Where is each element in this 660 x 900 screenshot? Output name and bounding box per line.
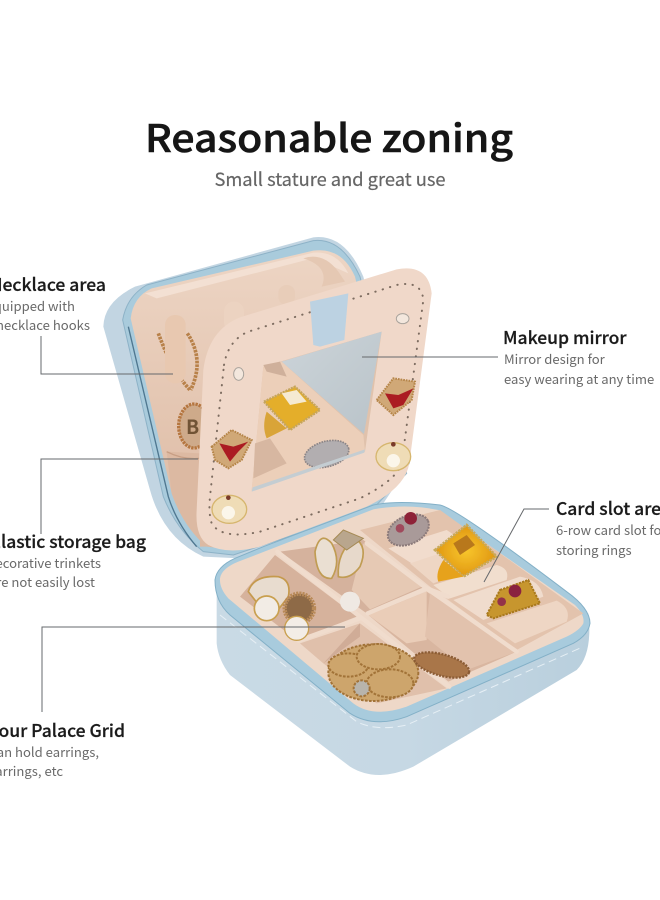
compartment: ring rows	[360, 510, 583, 650]
label: necklace area	[0, 272, 173, 374]
necklace hook	[165, 315, 186, 383]
ring roll 2	[410, 547, 487, 583]
flap stitching	[209, 284, 423, 534]
pearl brooch right	[376, 442, 411, 471]
lid flap	[196, 268, 432, 550]
yellow gem ring	[435, 525, 497, 582]
label: card slot area	[484, 496, 660, 582]
label: makeup mirror: Mirror design for	[504, 349, 606, 368]
mirrored silver ring	[301, 436, 352, 472]
tray lining	[220, 506, 584, 712]
label: card slot area: storing rings	[556, 540, 632, 559]
lid lining	[131, 250, 400, 550]
crown ring	[487, 580, 540, 618]
ruby ring	[383, 508, 434, 552]
small silver charm left	[234, 368, 244, 380]
strap	[310, 293, 348, 347]
label: makeup mirror: Makeup mirror	[503, 325, 627, 350]
small silver charm right	[396, 314, 409, 324]
body stitching	[220, 615, 583, 728]
label: elastic storage bag	[0, 459, 198, 591]
ring roll 4	[453, 577, 543, 620]
mirror glass	[282, 332, 382, 434]
compartment: pearls	[240, 555, 357, 640]
ring roll 3	[433, 565, 507, 598]
red flower left	[212, 430, 252, 468]
open lid: B	[186, 412, 199, 440]
mirror opening	[252, 332, 382, 491]
elastic pocket	[167, 452, 207, 547]
brooch	[328, 644, 418, 701]
subtitle: Small stature and great use	[214, 166, 446, 192]
bottom tray	[215, 502, 590, 775]
compartment: tulip	[280, 540, 427, 613]
ring roll 1	[388, 530, 467, 567]
mirrored ring	[264, 387, 320, 430]
tray body	[217, 593, 589, 775]
ring roll 5	[487, 601, 568, 643]
lid shell	[103, 237, 410, 558]
red flower right	[377, 378, 415, 415]
necklace pendant	[179, 404, 209, 448]
label: makeup mirror: easy wearing at any time	[504, 369, 654, 388]
lid zipper	[123, 240, 407, 555]
mirror reflection: interior	[252, 362, 365, 490]
label: four palace grid	[0, 627, 345, 780]
tulip earring	[315, 530, 363, 612]
tray zipper rim	[215, 502, 590, 722]
title: Reasonable zoning	[145, 108, 513, 163]
pearl jewelry	[248, 577, 314, 640]
compartment: necklace	[368, 592, 517, 682]
label: makeup mirror	[362, 325, 654, 388]
flap panel	[196, 268, 432, 550]
necklace chain	[158, 333, 197, 390]
open lid	[103, 237, 410, 558]
grid dividers	[277, 543, 517, 687]
gold necklace pile	[412, 647, 472, 683]
pearl brooch left	[212, 495, 247, 523]
lid zipper dark line	[128, 327, 197, 547]
compartment: brooch	[300, 623, 447, 703]
